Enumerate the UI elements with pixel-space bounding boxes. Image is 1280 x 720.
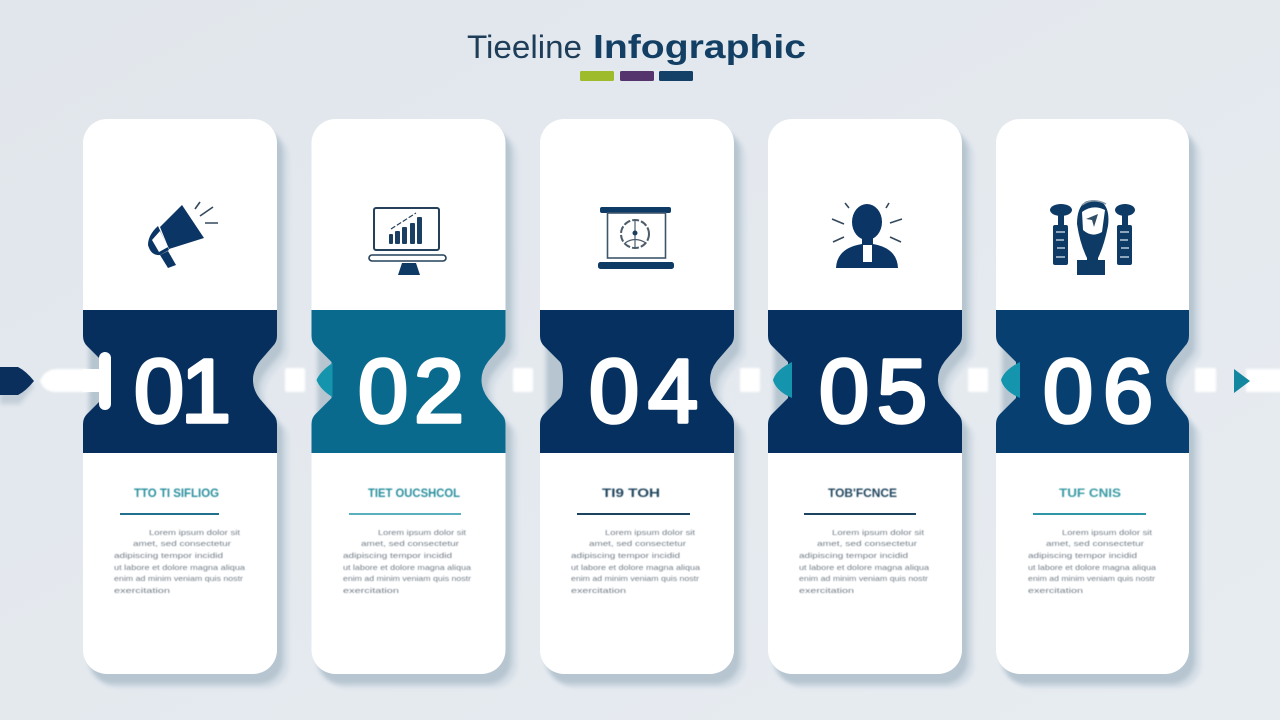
number 06: 06 [1043,342,1153,442]
body text 02: amet, sed consectetur [361,539,460,548]
body text 06: Lorem ipsum dolor sit [1062,528,1153,537]
icon: person with rays [832,203,902,268]
heading 05: TOB'FCNCE [828,486,897,500]
panel: step 02 [312,119,518,688]
icon: megaphone [148,202,218,268]
rule 04 [577,513,690,515]
body text 01: ut labore et dolore magna aliqua [114,563,246,572]
body text 06: amet, sed consectetur [1046,539,1145,548]
body text 01: exercitation [114,586,170,595]
rule 02 [349,513,461,515]
panel: step 05 [768,119,974,688]
number 02: 02 [358,342,464,442]
body text 02 [343,528,472,595]
body text 04: exercitation [571,586,626,595]
heading 02: TIET OUCSHCOL [368,486,460,500]
panel: step 01 [83,119,289,688]
body text 05: ut labore et dolore magna aliqua [799,563,930,572]
body text 06: enim ad minim veniam quis nostr [1028,574,1156,583]
body text 06 [1028,528,1157,595]
icon: monitor with chart [369,208,446,275]
body text 01: enim ad minim veniam quis nostr [114,574,244,583]
body text 02: enim ad minim veniam quis nostr [343,574,472,583]
body text 02: ut labore et dolore magna aliqua [343,563,472,572]
rule 06 [1033,513,1146,515]
heading 06: TUF CNIS [1059,486,1121,500]
body text 05: enim ad minim veniam quis nostr [799,574,929,583]
title: Infographic [593,28,806,65]
body text 04: adipiscing tempor incidid [571,551,680,560]
panel: step 06 [996,119,1201,688]
colour key bars [580,71,693,81]
title: Tieeline [467,29,582,65]
title [467,28,806,65]
rule 05 [804,513,916,515]
number 04: 04 [589,342,698,442]
rule 01 [120,513,219,515]
panel: step 04 [540,119,746,688]
body text 05 [799,528,930,595]
body text 05: exercitation [799,586,854,595]
body text 05: amet, sed consectetur [817,539,918,548]
body text 04: enim ad minim veniam quis nostr [571,574,700,583]
number 05: 05 [819,342,927,442]
body text 01: amet, sed consectetur [133,539,232,548]
body text 06: adipiscing tempor incidid [1028,551,1137,560]
body text 05: Lorem ipsum dolor sit [832,528,925,537]
body text 05: adipiscing tempor incidid [799,551,908,560]
body text 01: Lorem ipsum dolor sit [149,528,241,537]
body text 02: Lorem ipsum dolor sit [378,528,467,537]
body text 06: ut labore et dolore magna aliqua [1028,563,1157,572]
body text 04: ut labore et dolore magna aliqua [571,563,701,572]
body text 02: exercitation [343,586,399,595]
heading 01: TTO TI SIFLIOG [134,486,219,500]
icon: presentation screen [598,207,674,269]
body text 04 [571,528,701,595]
body text 04: Lorem ipsum dolor sit [605,528,696,537]
body text 01 [114,528,246,595]
body text 02: adipiscing tempor incidid [343,551,452,560]
timeline connector [0,367,1280,404]
body text 06: exercitation [1028,586,1083,595]
number 01: 01 [134,342,231,442]
icon: trophy and bottles [1050,200,1135,275]
heading 04: TI9 TOH [602,486,660,500]
body text 04: amet, sed consectetur [589,539,687,548]
body text 01: adipiscing tempor incidid [114,551,223,560]
